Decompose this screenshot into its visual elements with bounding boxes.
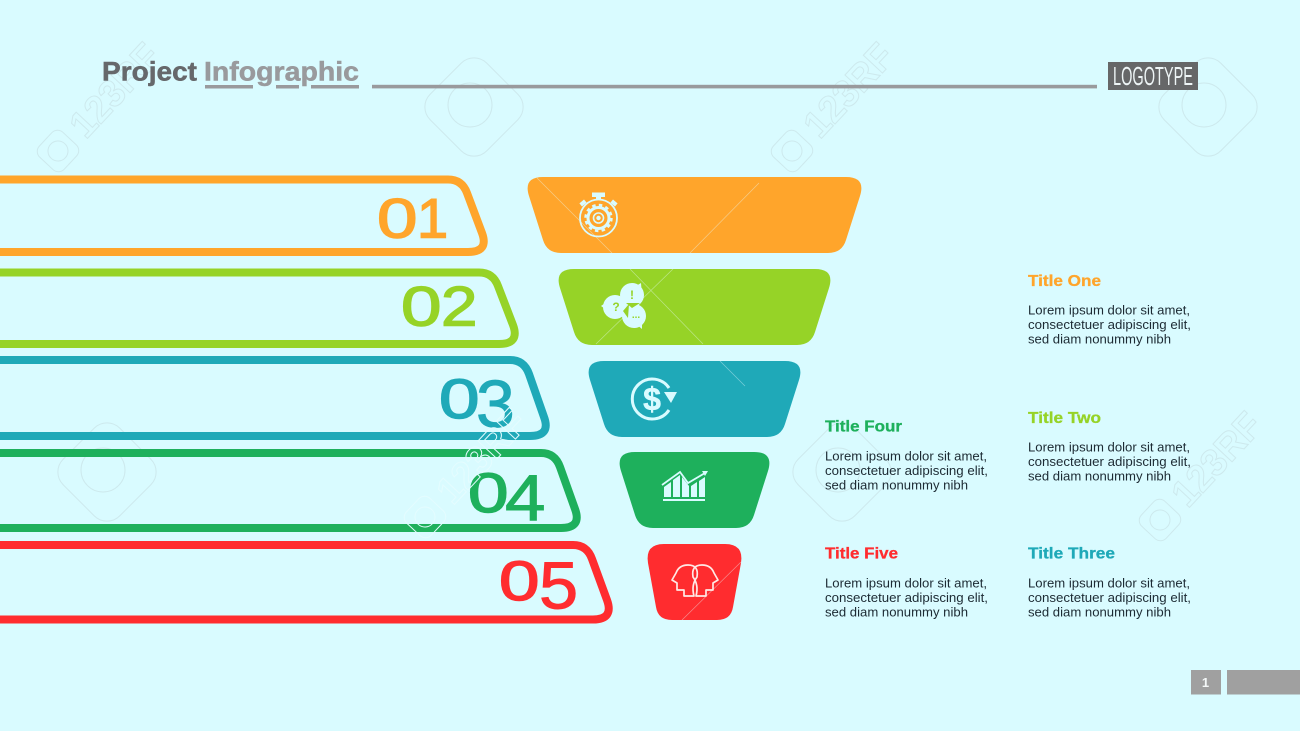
- panel: outlined bar 01: 1: [417, 186, 448, 250]
- title: [102, 56, 359, 88]
- icon: stopwatch with gear: [579, 192, 618, 236]
- page number: [1191, 670, 1221, 694]
- logotype badge: LOGOTYPE: [1113, 61, 1193, 91]
- watermark: 123RF stamp bottom right: 123RF: [1164, 405, 1271, 515]
- watermark: 123RF stamp top centre right: 123RF: [796, 36, 903, 146]
- text block: title three: sed diam nonummy nibh: [1028, 604, 1171, 620]
- header rule: [372, 85, 1097, 88]
- funnel segment 3: [589, 361, 800, 437]
- panel: outlined bar 04: 0: [468, 461, 508, 524]
- text block: title two: Lorem ipsum dolor sit amet,: [1028, 440, 1190, 454]
- text block: title three: Title Three: [1028, 546, 1115, 562]
- title: Project: [102, 56, 197, 86]
- watermark: 123RF stamp bottom right: [1134, 405, 1271, 547]
- panel: outlined bar 02: 0: [401, 275, 441, 338]
- panel: outlined bar 03: 0: [439, 367, 479, 430]
- text block: title two: [1028, 410, 1191, 484]
- text block: title one: consectetuer adipiscing elit,: [1028, 317, 1191, 332]
- panel: outlined bar 01: [0, 180, 484, 252]
- title: Infographic: [204, 56, 359, 86]
- panel: outlined bar 03: 3: [476, 367, 515, 442]
- text block: title three: consectetuer adipiscing elit,: [1028, 590, 1191, 605]
- icon: three speech bubbles: ...: [632, 310, 640, 321]
- text block: title two: Title Two: [1028, 410, 1101, 427]
- panel: outlined bar 05: [0, 545, 609, 623]
- watermark: 123RF stamp top left: [32, 36, 169, 178]
- icon: three speech bubbles: [601, 283, 646, 329]
- icon: dollar with circular arrow: [632, 379, 677, 419]
- panel: outlined bar 05: 5: [539, 548, 578, 623]
- funnel segment 4: [620, 452, 769, 528]
- page number: 1: [1202, 675, 1209, 690]
- watermark: stamp egg bottom left: [50, 415, 164, 529]
- text block: title two: sed diam nonummy nibh: [1028, 468, 1171, 484]
- watermark: 123RF stamp over bars: [399, 402, 536, 544]
- text block: title four: [825, 418, 988, 492]
- funnel segment 1: [528, 177, 861, 253]
- text block: title four: Lorem ipsum dolor sit amet,: [825, 448, 987, 464]
- panel: outlined bar 04: [0, 453, 577, 534]
- watermark: stamp egg top right: [1151, 50, 1265, 164]
- icon: dollar with circular arrow: $: [643, 381, 661, 417]
- icon: three speech bubbles: ?: [612, 300, 620, 314]
- funnel segment 2: [559, 269, 830, 345]
- watermark: stamp egg top centre: [417, 50, 531, 164]
- icon: growth bar chart: [662, 471, 708, 501]
- text block: title four: Title Four: [825, 418, 902, 436]
- text block: title three: Lorem ipsum dolor sit amet,: [1028, 576, 1190, 590]
- text block: title three: [1028, 546, 1191, 620]
- text block: title five: Lorem ipsum dolor sit amet,: [825, 576, 987, 590]
- panel: outlined bar 02: [0, 272, 515, 344]
- icon: two overlapping heads: [672, 565, 718, 596]
- panel: outlined bar 05: 0: [499, 549, 539, 612]
- text block: title five: consectetuer adipiscing elit,: [825, 590, 988, 605]
- watermark: stamp egg bottom centre: [785, 415, 899, 529]
- panel: outlined bar 03: [0, 360, 546, 442]
- watermark: 123RF stamp top centre right: [766, 36, 903, 178]
- panel: outlined bar 01: 0: [377, 187, 417, 250]
- text block: title four: sed diam nonummy nibh: [825, 478, 968, 492]
- panel: outlined bar 02: 2: [441, 275, 477, 337]
- text block: title five: sed diam nonummy nibh: [825, 604, 968, 620]
- icon: three speech bubbles: !: [630, 288, 634, 302]
- text block: title two: consectetuer adipiscing elit,: [1028, 454, 1191, 469]
- text block: title five: Title Five: [825, 546, 898, 562]
- text block: title one: [1028, 273, 1191, 346]
- watermark: 123RF stamp over bars: 123RF: [429, 402, 536, 512]
- watermark: 123RF stamp top left: 123RF: [62, 36, 169, 146]
- text block: title four: consectetuer adipiscing elit,: [825, 463, 988, 478]
- text block: title five: [825, 546, 988, 620]
- text block: title one: Lorem ipsum dolor sit amet,: [1028, 302, 1190, 318]
- logotype badge: [1108, 61, 1198, 91]
- text block: title one: Title One: [1028, 273, 1101, 290]
- text block: title one: sed diam nonummy nibh: [1028, 332, 1171, 346]
- footer bar: [1227, 670, 1300, 694]
- panel: outlined bar 04: 4: [505, 462, 545, 534]
- funnel segment 5: [648, 544, 741, 620]
- watermark hairlines across funnel: [537, 178, 759, 620]
